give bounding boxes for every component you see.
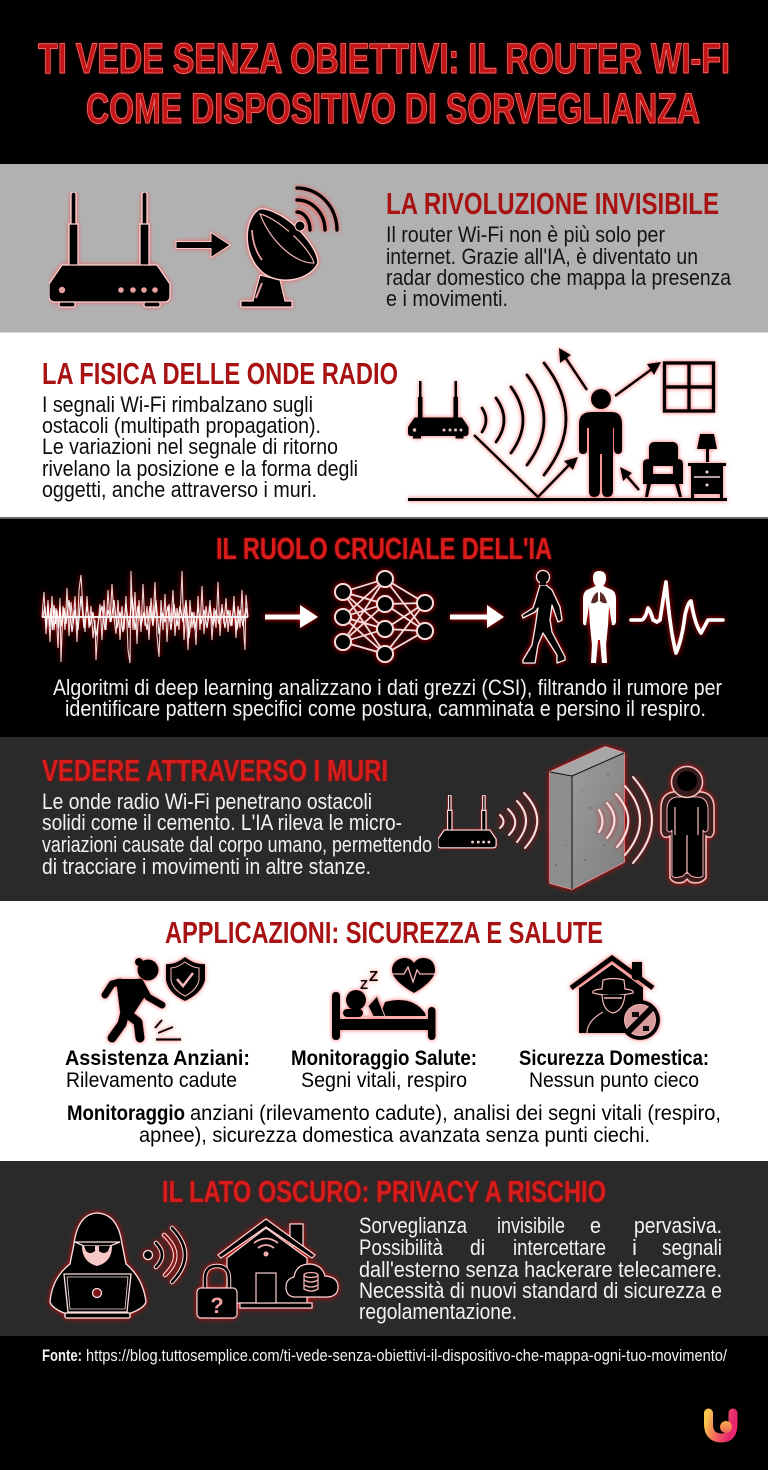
text block: segnali [662, 1235, 722, 1260]
title [38, 35, 730, 133]
caption: sicurezza domestica: Sicurezza Domestica: [519, 1047, 709, 1070]
caption: assistenza anziani: Assistenza Anziani: [65, 1047, 250, 1070]
text block: internet. Grazie all'IA, è diventato un [386, 244, 698, 269]
text block: solidi come il cemento. L'IA rileva le micro- [42, 810, 402, 835]
text block [359, 1213, 722, 1324]
source line: Fonte: [42, 1346, 82, 1365]
floor and reflection lines [408, 357, 727, 500]
arrow [265, 605, 318, 628]
panel: il lato oscuro [0, 1161, 768, 1336]
icon: body with lungs [583, 571, 616, 663]
illustration: multipath diagram [408, 348, 727, 500]
icon: router [408, 381, 468, 438]
radio waves [144, 1228, 185, 1282]
icon: walking figure [522, 570, 565, 663]
radio waves [482, 363, 566, 475]
caption: sicurezza domestica: Nessun punto cieco [529, 1069, 699, 1092]
text block: Le onde radio Wi-Fi penetrano ostacoli [42, 789, 372, 814]
icon: router [438, 795, 496, 848]
heading: APPLICAZIONI: SICUREZZA E SALUTE [165, 915, 603, 950]
icon: sleep monitoring: Z [369, 968, 378, 985]
icon: person behind wall [661, 766, 714, 883]
panel: il ruolo cruciale dell'IA [0, 519, 768, 737]
icon: armchair [643, 442, 683, 497]
text block: Monitoraggio [67, 1102, 185, 1125]
text block: dall'esterno senza hackerare telecamere. [359, 1257, 722, 1282]
text block: e i movimenti. [386, 286, 508, 311]
icon: padlock: ? [210, 1293, 224, 1318]
radio waves through wall [599, 777, 652, 863]
text block [67, 1102, 721, 1147]
panel: la fisica delle onde radio [0, 332, 768, 519]
text block [53, 675, 722, 721]
text block: invisibile [497, 1213, 565, 1238]
icon: fall detection [105, 957, 205, 1040]
caption: sicurezza domestica [519, 1047, 709, 1092]
text block: radar domestico che mappa la presenza [386, 265, 732, 290]
text block: apnee), sicurezza domestica avanzata senza punti ciechi. [139, 1124, 650, 1147]
caption: assistenza anziani: Rilevamento cadute [66, 1069, 237, 1092]
caption: monitoraggio salute: Segni vitali, respiro [301, 1069, 467, 1092]
illustration: concrete wall [550, 747, 624, 889]
heading: IL LATO OSCURO: PRIVACY A RISCHIO [162, 1174, 606, 1209]
icon: sleep monitoring: Z [360, 977, 368, 992]
text block: intercettare [513, 1235, 606, 1260]
icon: home security [571, 958, 660, 1040]
icon: satellite dish [241, 188, 337, 307]
caption: assistenza anziani [65, 1047, 250, 1092]
panel: applicazioni [0, 901, 768, 1161]
text block: i [632, 1235, 637, 1260]
text block: anziani (rilevamento cadute), analisi dei segni vitali (respiro, [190, 1102, 721, 1125]
icon: router [49, 192, 170, 307]
icon: sleep monitoring [332, 958, 436, 1040]
text block: variazioni causate dal corpo umano, permettendo [42, 832, 432, 857]
text block [42, 392, 358, 502]
text block: Le variazioni nel segnale di ritorno [42, 434, 338, 459]
icon: nightstand and lamp [688, 434, 726, 498]
text block: pervasiva. [634, 1213, 722, 1238]
icon: house with lock and cloud [197, 1219, 338, 1318]
panel: vedere attraverso i muri [0, 737, 768, 901]
text block: ostacoli (multipath propagation). [42, 413, 321, 438]
panel: title header [0, 0, 768, 164]
text block: rivelano la posizione e la forma degli [42, 456, 358, 481]
heading: IL RUOLO CRUCIALE DELL'IA [216, 531, 552, 566]
text block [386, 222, 732, 311]
text block: Necessità di nuovi standard di sicurezza e [359, 1278, 722, 1303]
arrow [176, 232, 230, 258]
icon: heartbeat line [631, 582, 723, 653]
heading: VEDERE ATTRAVERSO I MURI [42, 753, 388, 788]
icon: logo [708, 1413, 733, 1438]
caption: monitoraggio salute [291, 1047, 477, 1092]
panel: la rivoluzione invisibile [0, 164, 768, 332]
text block: Possibilità [359, 1235, 444, 1260]
text block: Sorveglianza [359, 1213, 468, 1238]
text block: oggetti, anche attraverso i muri. [42, 477, 317, 502]
chart: raw signal waveform [42, 571, 248, 663]
text block [42, 789, 432, 879]
text block: regolamentazione. [359, 1299, 517, 1324]
icon: padlock [197, 1266, 237, 1318]
text block: identificare pattern specifici come postura, camminata e persino il respiro. [65, 696, 706, 721]
text block: di tracciare i movimenti in altre stanze. [42, 854, 371, 879]
heading: LA FISICA DELLE ONDE RADIO [42, 356, 398, 391]
text block: e [590, 1213, 601, 1238]
caption: monitoraggio salute: Monitoraggio Salute: [291, 1047, 477, 1070]
icon: person [579, 389, 622, 497]
text block: di [470, 1235, 485, 1260]
panel: footer [0, 1336, 768, 1470]
icon: window [664, 363, 714, 411]
diagram: neural network [335, 571, 433, 662]
arrow [450, 605, 504, 628]
arrowheads [559, 348, 661, 481]
icon: cloud database [286, 1264, 338, 1297]
icon: hacker [50, 1213, 146, 1318]
text block: I segnali Wi-Fi rimbalzano sugli [42, 392, 313, 417]
radio waves [500, 793, 537, 848]
text block: Il router Wi-Fi non è più solo per [386, 222, 665, 247]
